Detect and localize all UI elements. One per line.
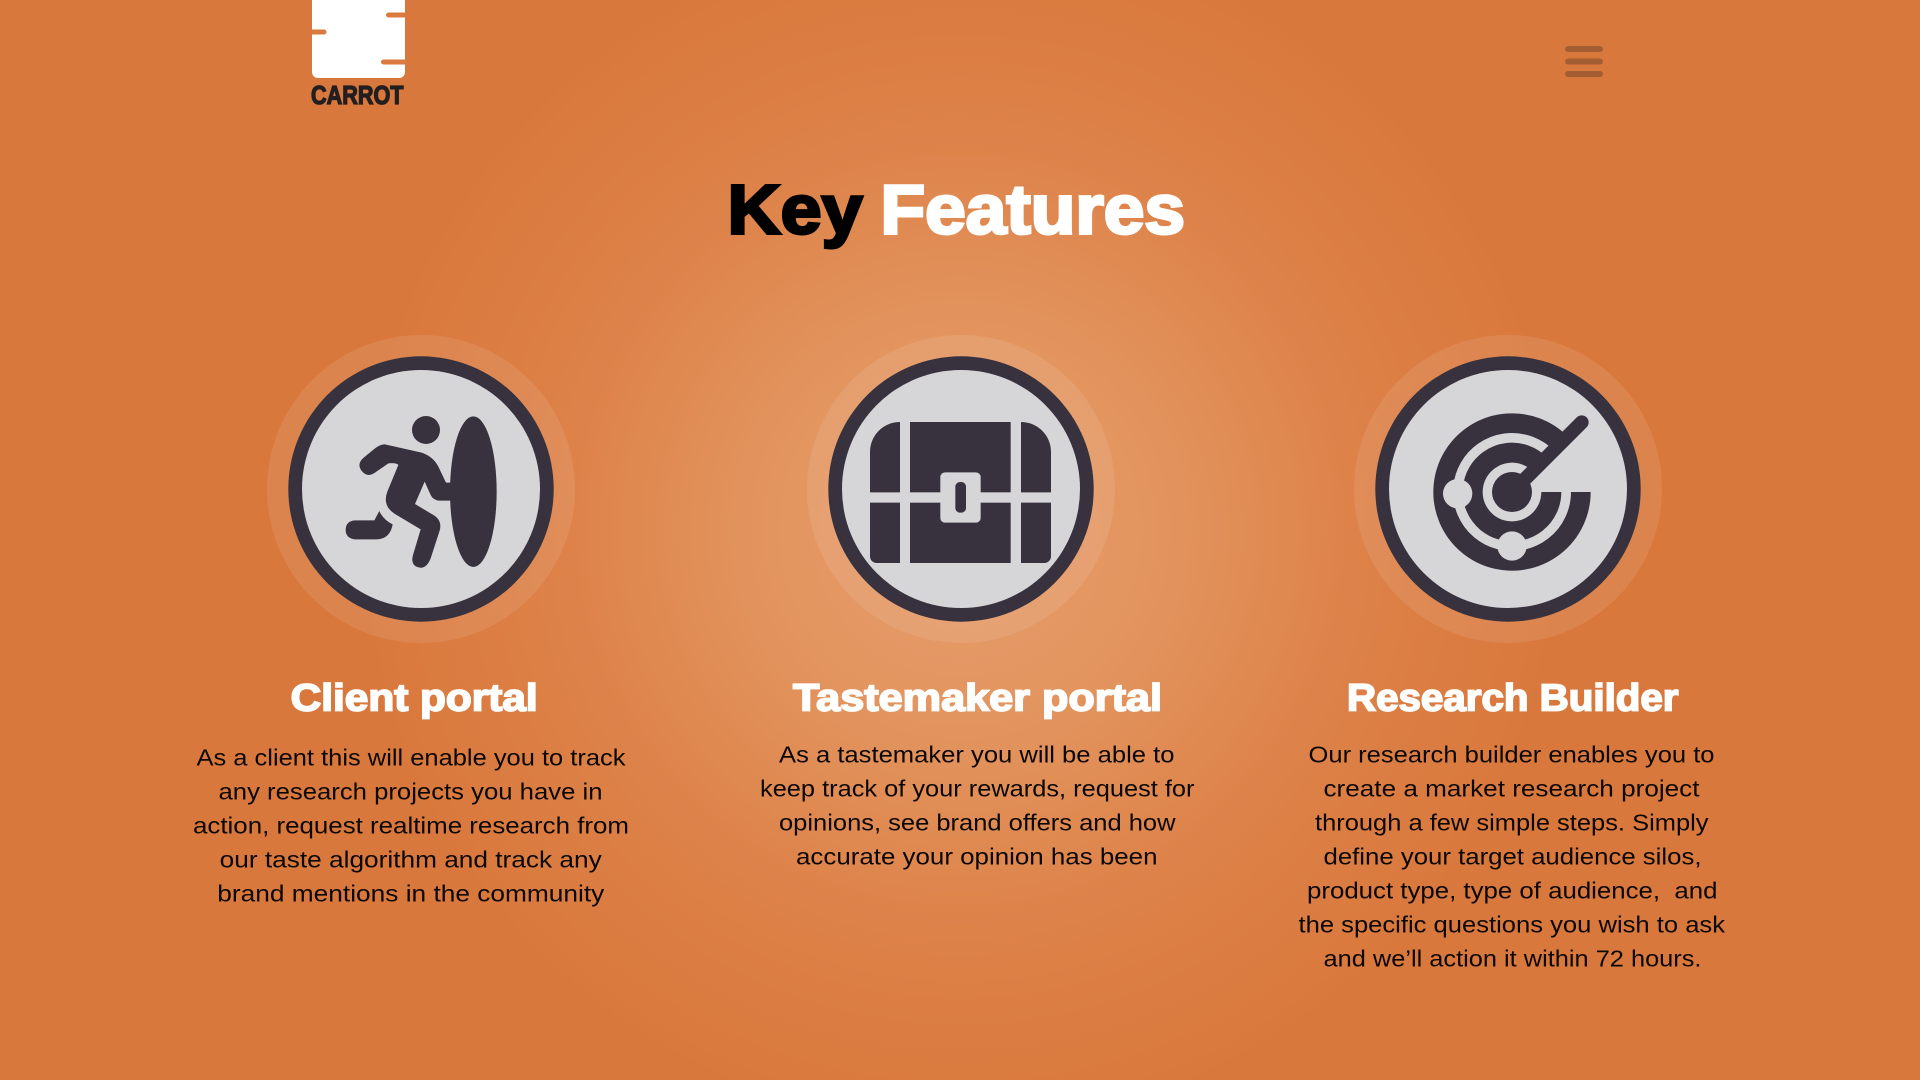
logo: Carrot: CARROT <box>311 82 404 110</box>
icon: hamburger menu <box>1565 46 1603 77</box>
text: client portal description: brand mentions in the community <box>217 880 605 906</box>
text: tastemaker portal description: keep track of your rewards, request for <box>760 776 1195 802</box>
title <box>728 170 1185 248</box>
text: tastemaker portal description: opinions, see brand offers and how <box>779 810 1177 836</box>
icon: treasure chest <box>807 335 1115 643</box>
text: client portal description: As a client this will enable you to track <box>196 744 626 770</box>
heading: client portal: Client portal <box>291 678 538 720</box>
text: research builder description <box>1298 742 1725 972</box>
icon: runner with shield <box>267 335 575 643</box>
logo: Carrot <box>311 0 405 110</box>
title: Features <box>880 170 1185 248</box>
text: research builder description: define your target audience silos, <box>1324 844 1702 870</box>
text: tastemaker portal description: As a tastemaker you will be able to <box>779 742 1174 768</box>
text: research builder description: the specific questions you wish to ask <box>1298 912 1725 938</box>
title: Key <box>728 170 863 248</box>
text: research builder description: Our research builder enables you to <box>1308 742 1714 768</box>
text: client portal description: action, request realtime research from <box>193 812 629 838</box>
heading: tastemaker portal: Tastemaker portal <box>793 678 1162 720</box>
text: client portal description <box>193 744 629 906</box>
text: research builder description: and we’ll action it within 72 hours. <box>1324 946 1702 972</box>
panel: client portal <box>193 335 629 906</box>
icon: radar <box>1354 335 1662 643</box>
panel: research builder <box>1298 335 1725 972</box>
text: client portal description: any research projects you have in <box>218 778 602 804</box>
heading: research builder: Research Builder <box>1347 678 1679 720</box>
text: research builder description: product type, type of audience, and <box>1307 878 1718 904</box>
text: tastemaker portal description <box>760 742 1195 870</box>
panel: tastemaker portal <box>760 335 1195 870</box>
text: research builder description: create a market research project <box>1324 776 1700 802</box>
text: tastemaker portal description: accurate your opinion has been <box>796 844 1158 870</box>
text: research builder description: through a few simple steps. Simply <box>1315 810 1709 836</box>
text: client portal description: our taste algorithm and track any <box>220 846 602 872</box>
